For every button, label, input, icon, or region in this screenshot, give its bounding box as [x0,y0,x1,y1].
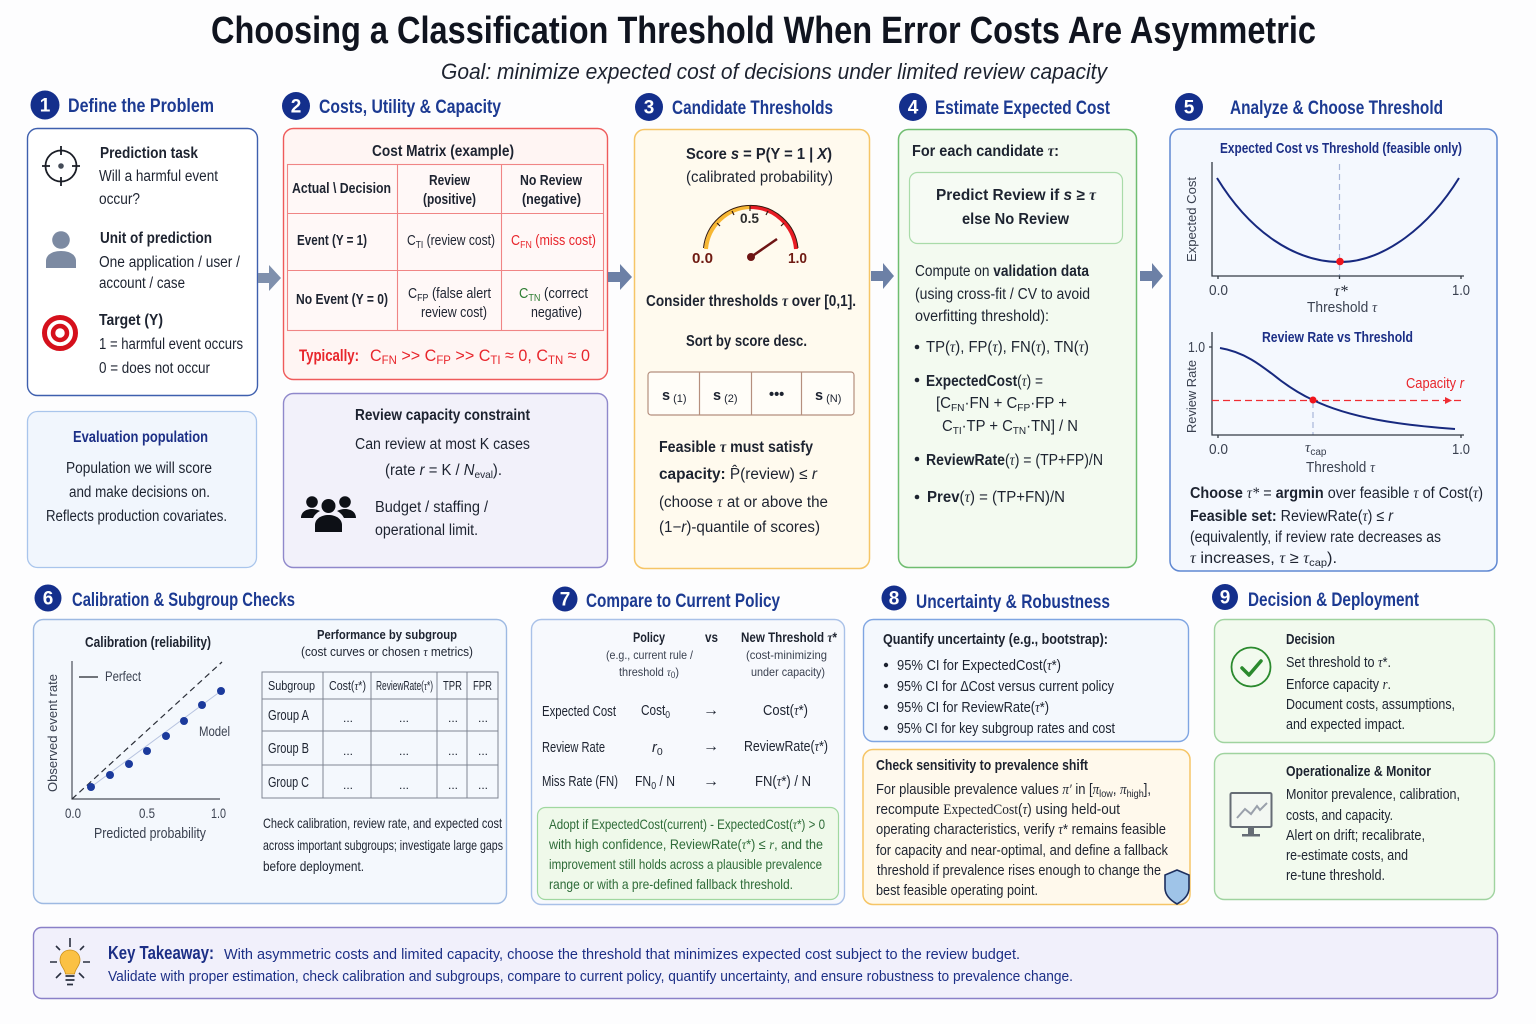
table: performance by subgroup: ... [399,744,409,758]
panel: quantify uncertainty: 95% CI for ExpectedCost(τ*) [897,658,1061,674]
panel: calibration and subgroup checks [34,620,506,904]
table: performance by subgroup: ... [478,778,488,792]
panel: candidate thresholds: Feasible τ must satisfy [659,439,813,456]
panel: prevalence shift sensitivity: high [1127,788,1144,800]
heading: step 3: Candidate Thresholds [672,98,833,119]
typical cost ordering: Typically: [299,346,359,365]
heading: step 5 [1175,93,1443,121]
panel: quantify uncertainty [864,620,1188,742]
text: target: Target (Y) [99,312,163,329]
text: subgroup note: Check calibration, review rate, and expected cost [263,815,502,831]
heading: step 7: Compare to Current Policy [586,591,780,612]
panel: prevalence shift sensitivity: π [1120,782,1127,798]
chart: calibration reliability: 1.0 [211,805,226,821]
heading: step 2: 2 [291,96,301,118]
panel: evaluation population: Evaluation population [73,429,208,446]
chart: calibration reliability: Model [199,723,230,739]
heading: step 6: Calibration & Subgroup Checks [72,590,295,611]
comparison table: r [652,740,657,756]
metric bullets: TI [953,425,962,437]
panel: evaluation population: and make decisions on. [69,484,210,501]
table: performance by subgroup: TPR [443,678,462,693]
chart: expected cost vs threshold: 0.0 [1209,283,1228,299]
arrow: step 3 to 4 [871,263,894,289]
metric bullets: ExpectedCost(τ) = [926,373,1043,390]
table: performance by subgroup: Group C [268,775,309,791]
panel: cost matrix: Cost Matrix (example) [372,143,514,160]
comparison table: Review Rate [542,740,605,756]
text: unit of prediction: Unit of prediction [100,230,212,247]
table: performance by subgroup: ReviewRate(τ*) [376,678,433,693]
cost matrix table: C [407,232,418,249]
comparison table: vs [705,629,718,645]
sorted score array: (N) [823,393,841,405]
text: target [99,312,243,377]
panel: prevalence shift sensitivity [863,750,1190,904]
heading: step 3 [635,93,833,121]
heading: step 3: 3 [644,98,654,118]
metric bullets: ReviewRate(τ) = (TP+FP)/N [926,452,1103,469]
table: performance by subgroup: ... [448,744,458,758]
callout: adoption rule [538,808,838,900]
sorted score array: (1) [670,393,687,405]
panel: quantify uncertainty: Quantify uncertainty (e.g., bootstrap): [883,631,1108,648]
heading: step 7 [552,586,780,612]
panel: analyze and choose threshold [1170,129,1497,571]
panel: prevalence shift sensitivity: best feasible operating point. [876,882,1038,899]
chart: review rate vs threshold: cap [1310,447,1327,458]
panel: quantify uncertainty: 95% CI for ReviewRate(τ*) [897,700,1049,716]
metric bullets: ·TN] / N [1026,418,1078,435]
panel: key takeaway [34,928,1498,998]
heading: step 1: Define the Problem [68,96,214,117]
table: performance by subgroup: ... [399,711,409,725]
gauge: 0.5 [740,210,759,226]
table: performance by subgroup: ... [343,778,353,792]
arrow: step 4 to 5 [1140,263,1163,289]
decision rule box: Predict Review if s ≥ τ [936,187,1097,204]
typical cost ordering: FP [436,353,451,367]
sorted score array: s [713,388,721,404]
panel: key takeaway: Key Takeaway: [108,943,214,963]
metric bullets: FP [1017,402,1030,414]
comparison table: 0 [671,670,675,680]
text: subgroup note [263,815,503,874]
text: prediction task [99,145,219,208]
table: performance by subgroup: Group A [268,708,309,724]
table: performance by subgroup: ... [448,778,458,792]
chart: review rate vs threshold: 0.0 [1209,442,1228,458]
chart: expected cost vs threshold: τ* [1334,283,1348,300]
sorted score array [648,372,854,415]
panel: candidate thresholds: Sort by score desc. [686,333,807,350]
heading: step 2: Costs, Utility & Capacity [319,97,501,118]
metric bullets: FN [951,402,964,414]
panel: quantify uncertainty: 95% CI for key subgroup rates and cost [897,721,1115,737]
panel: prevalence shift sensitivity: for capacity and near-optimal, and define a fallback [876,842,1168,859]
heading: step 4: 4 [908,98,919,118]
panel: evaluation population: Population we will score [66,460,212,477]
panel: review capacity: ). [493,462,502,479]
panel: decision: Document costs, assumptions, [1286,697,1455,713]
table: performance by subgroup [262,627,498,798]
typical cost ordering: ≈ 0, C [501,346,548,365]
text: choice rule: Choose τ* = argmin over feasible τ of Cost(τ) [1190,485,1483,502]
cost matrix table: (correct [540,285,589,302]
heading: step 4 [899,93,1111,121]
typical cost ordering: >> C [397,346,436,365]
sorted score array: (2) [721,393,738,405]
chart: calibration reliability: 0.5 [139,805,155,821]
table: performance by subgroup: (cost curves or chosen τ metrics) [301,644,473,659]
arrow: step 1 to 2 [258,265,281,291]
subtitle: goal: Goal: minimize expected cost of decisions under limited review capacity [441,59,1109,84]
metric bullets: C [942,418,953,435]
panel: operationalize and monitor: Operationalize & Monitor [1286,763,1431,780]
heading: step 9 [1212,584,1420,611]
panel: prevalence shift sensitivity: , [1113,781,1120,798]
panel: evaluation population [28,412,256,568]
panel: operationalize and monitor [1214,754,1494,900]
table: performance by subgroup: Group B [268,741,309,757]
panel: prevalence shift sensitivity: Check sensitivity to prevalence shift [876,757,1088,774]
text: choice rule: τ increases, τ ≥ τ [1190,550,1309,567]
text: subgroup note: across important subgroups; investigate large gaps [263,837,503,853]
metric bullets: ·FN + C [964,395,1017,412]
metric bullets: TN [1013,425,1026,437]
heading: step 2 [282,92,501,120]
panel: prevalence shift sensitivity: low [1099,788,1113,800]
sorted score array: s [662,388,670,404]
panel: decision: Enforce capacity r. [1286,677,1391,693]
icon: check circle [1232,648,1270,686]
text: choice rule: Feasible set: ReviewRate(τ) ≤ r [1190,508,1394,525]
title: Choosing a Classification Threshold When Error Costs Are Asymmetric [211,10,1316,52]
metric bullets: ·FP + [1030,395,1067,412]
comparison table: FN(τ*) / N [755,774,811,790]
comparison table: (e.g., current rule / [606,648,694,662]
icon: target [44,318,76,348]
metric bullets: [C [936,395,952,412]
text: unit of prediction [99,230,241,292]
comparison table: / N [656,774,675,790]
chart: review rate vs threshold: 1.0 [1452,442,1470,458]
comparison table: Policy [633,629,665,645]
cost matrix table: (negative) [522,191,581,208]
panel: candidate thresholds: (1−r)-quantile of scores) [659,519,820,536]
panel: review capacity: Can review at most K cases [355,436,530,453]
chart: review rate vs threshold: 1.0 [1188,340,1205,356]
cost matrix table: No Event (Y = 0) [296,291,388,308]
comparison table: 0 [665,709,670,721]
chart: calibration reliability [45,634,230,842]
comparison table: ) [675,665,679,679]
panel: estimate expected cost: (using cross-fit / CV to avoid [915,286,1090,303]
panel: evaluation population: Reflects production covariates. [46,508,227,525]
comparison table: Cost [641,703,671,719]
metric bullets: ·TP + C [962,418,1013,435]
chart: calibration reliability: 0.0 [65,805,81,821]
comparison table: Miss Rate (FN) [542,774,618,790]
heading: step 9: 9 [1220,588,1230,608]
panel: candidate thresholds: Consider thresholds τ over [0,1]. [646,293,856,310]
cost matrix table: (miss cost) [532,232,596,249]
panel: candidate thresholds: Score s = P(Y = 1 | X) [686,146,832,163]
table: performance by subgroup: Performance by subgroup [317,627,457,642]
chart: expected cost vs threshold: Threshold τ [1307,299,1378,316]
panel: prevalence shift sensitivity: operating characteristics, verify τ* remains feasible [876,821,1166,838]
panel: key takeaway: Validate with proper estimation, check calibration and subgroups, compare to current policy, quantify uncertainty, and ensure robustness to prevalence change. [108,968,1073,985]
comparison table: → [703,773,719,790]
table: performance by subgroup: FPR [473,678,492,693]
panel: define the problem [28,128,258,396]
panel: candidate thresholds: capacity: P̂(review) ≤ r [659,465,818,483]
chart: review rate vs threshold [1184,329,1470,476]
gauge [692,205,807,267]
table: performance by subgroup: ... [448,711,458,725]
table: performance by subgroup: ... [478,711,488,725]
text: prediction task: occur? [99,191,140,208]
sorted score array: s [815,388,823,404]
typical cost ordering: TI [490,353,501,367]
chart: review rate vs threshold: τ [1305,440,1310,456]
text: unit of prediction: One application / user / [99,254,241,271]
typical cost ordering: >> C [451,346,490,365]
panel: cost matrix [284,128,608,380]
chart: calibration reliability: Calibration (reliability) [85,634,211,651]
cost matrix table [288,164,604,330]
panel: prevalence shift sensitivity: recompute ExpectedCost(τ) using held-out [876,801,1121,818]
callout: adoption rule: Adopt if ExpectedCost(current) - ExpectedCost(τ*) > 0 [549,816,825,833]
icon: crosshair [42,146,80,186]
cost matrix table: C [511,232,522,249]
panel: review capacity: eval [474,469,493,481]
comparison table: ReviewRate(τ*) [744,739,828,755]
panel: review capacity: Budget / staffing / [375,499,489,516]
chart: expected cost vs threshold: Expected Cost [1184,177,1199,262]
panel: decision [1214,620,1494,742]
cost matrix table: (review cost) [423,232,495,249]
icon: monitor [1230,793,1272,836]
chart: calibration reliability: Predicted probability [94,825,206,842]
chart: expected cost vs threshold: Expected Cost vs Threshold (feasible only) [1220,140,1462,157]
comparison table: FN [635,774,654,790]
text: choice rule: ). [1327,550,1337,567]
heading: step 1 [30,90,214,120]
heading: step 6 [34,584,295,612]
callout: adoption rule: with high confidence, ReviewRate(τ*) ≤ r, and the [548,836,823,853]
typical cost ordering: FN [382,353,397,367]
panel: operationalize and monitor: costs, and capacity. [1286,808,1393,824]
heading: step 1: 1 [40,96,51,116]
cost matrix table: review cost) [421,304,487,321]
panel: prevalence shift sensitivity: ], [1144,781,1151,798]
panel: prevalence shift sensitivity: threshold if prevalence rises enough to change the [877,862,1161,879]
text: target: 0 = does not occur [99,360,210,377]
callout: adoption rule: range or with a pre-defined fallback threshold. [549,876,793,892]
heading: step 5: Analyze & Choose Threshold [1230,98,1443,119]
panel: review capacity: Review capacity constraint [355,407,530,424]
metric bullets: TP(τ), FP(τ), FN(τ), TN(τ) [926,339,1089,356]
comparison table: threshold τ [619,665,671,679]
panel: estimate expected cost [898,130,1136,568]
text: choice rule [1190,485,1483,569]
text: unit of prediction: account / case [99,275,185,292]
typical cost ordering: C [370,346,382,365]
panel: quantify uncertainty: 95% CI for ΔCost versus current policy [897,679,1115,695]
heading: step 6: 6 [43,588,53,610]
heading: step 8: 8 [889,588,899,610]
panel: operationalize and monitor: Monitor prevalence, calibration, [1286,787,1460,803]
panel: operationalize and monitor: re-estimate costs, and [1286,848,1408,864]
panel: key takeaway: With asymmetric costs and limited capacity, choose the threshold that minimizes expected cost subject to the review budget. [224,946,1020,963]
panel: estimate expected cost: overfitting threshold): [915,308,1049,325]
comparison table: under capacity) [751,665,825,679]
panel: review capacity [284,394,608,568]
decision rule box: else No Review [962,211,1070,228]
cost matrix table: Event (Y = 1) [297,232,367,249]
panel: estimate expected cost: For each candidate τ: [912,143,1059,160]
heading: step 8: Uncertainty & Robustness [916,592,1110,613]
typical cost ordering: ≈ 0 [563,346,590,365]
icon: light bulb [50,938,90,984]
typical cost ordering [299,346,590,367]
table: performance by subgroup: ... [343,711,353,725]
comparison table: (cost-minimizing [746,648,827,662]
typical cost ordering: TN [548,353,563,367]
cost matrix table: TI [416,239,423,251]
arrow: step 2 to 3 [608,264,632,290]
cost matrix table: FP [417,292,428,304]
panel: prevalence shift sensitivity: For plausible prevalence values π′ in [π [876,781,1100,798]
text: subgroup note: before deployment. [263,858,364,874]
chart: review rate vs threshold: Threshold τ [1306,459,1376,476]
chart: review rate vs threshold: Capacity r [1406,375,1465,392]
text: prediction task: Will a harmful event [99,168,219,185]
heading: step 9: Decision & Deployment [1248,590,1420,611]
gauge: 1.0 [788,251,807,267]
panel: compare to current policy [532,620,844,904]
cost matrix table: negative) [531,304,582,321]
heading: step 7: 7 [560,590,570,610]
comparison table: Expected Cost [542,704,616,720]
comparison table: New Threshold τ* [741,629,837,646]
cost matrix table: TN [528,292,540,304]
heading: step 5: 5 [1184,98,1195,118]
panel: decision: Decision [1286,631,1335,648]
callout: adoption rule: improvement still holds across a plausible prevalence [549,856,822,872]
panel: review capacity: operational limit. [375,522,478,539]
panel: candidate thresholds: (calibrated probability) [686,169,833,186]
comparison table: → [703,738,719,755]
metric bullets [915,339,1103,506]
comparison table: Cost(τ*) [763,703,808,719]
cost matrix table: FN [520,239,532,251]
panel: estimate expected cost: Compute on validation data [915,263,1089,280]
panel: operationalize and monitor: Alert on drift; recalibrate, [1286,828,1425,844]
chart: calibration reliability: Observed event rate [45,674,60,792]
icon: people [301,496,356,532]
cost matrix table: Review [429,172,470,189]
metric bullets: Prev(τ) = (TP+FN)/N [927,489,1065,506]
panel: decision: Set threshold to τ*. [1286,655,1391,671]
comparison table: 0 [651,780,656,792]
table: performance by subgroup: Subgroup [268,678,315,693]
icon: person [46,231,76,268]
chart: calibration reliability: Perfect [105,668,141,684]
chart: expected cost vs threshold: 1.0 [1452,283,1470,299]
cost matrix table: (positive) [423,191,476,208]
text: prediction task: Prediction task [100,145,198,162]
table: performance by subgroup: ... [343,744,353,758]
table: performance by subgroup: Cost(τ*) [329,678,366,693]
panel: review capacity: (rate r = K / N [385,462,475,479]
sorted score array: ••• [769,387,784,403]
table: performance by subgroup: ... [399,778,409,792]
cost matrix table: Actual \ Decision [292,180,391,197]
icon: shield [1165,870,1189,904]
gauge: 0.0 [692,251,713,267]
text: choice rule: cap [1309,557,1327,569]
panel: candidate thresholds: (choose τ at or above the [659,494,828,511]
panel: candidate thresholds [634,130,870,568]
comparison table: 0 [657,746,663,758]
cost matrix table: (false alert [428,285,492,302]
chart: review rate vs threshold: Review Rate [1184,360,1199,433]
chart: expected cost vs threshold [1184,140,1470,316]
panel: operationalize and monitor: re-tune threshold. [1286,868,1385,884]
cost matrix table: C [408,285,419,302]
chart: review rate vs threshold: Review Rate vs Threshold [1262,329,1413,346]
cost matrix table: C [519,285,529,302]
heading: step 4: Estimate Expected Cost [935,98,1111,119]
comparison table [542,629,837,792]
heading: step 8 [882,586,1110,613]
text: choice rule: (equivalently, if review rate decreases as [1190,529,1441,546]
text: target: 1 = harmful event occurs [99,336,243,353]
table: performance by subgroup: ... [478,744,488,758]
panel: decision: and expected impact. [1286,717,1405,733]
decision rule box [910,172,1122,244]
cost matrix table: No Review [520,172,582,189]
comparison table: → [703,702,719,719]
